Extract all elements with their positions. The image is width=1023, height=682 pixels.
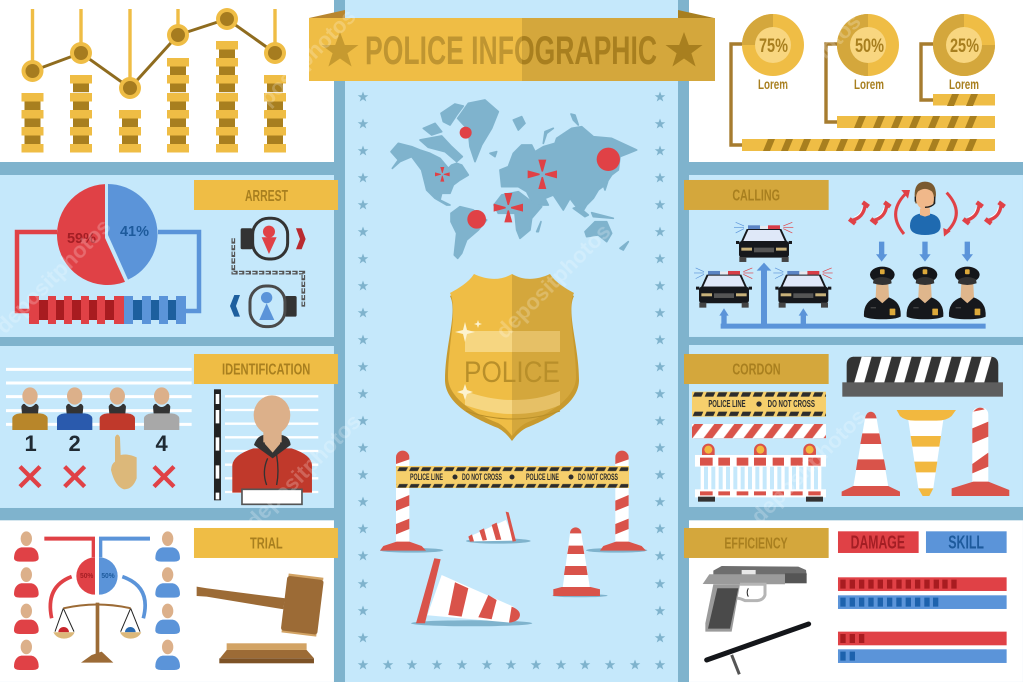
- police tape: POLICE LINE: [708, 399, 746, 410]
- title ribbon: [309, 10, 715, 81]
- striped barrier bar: [692, 424, 826, 438]
- panel: trial: [0, 520, 338, 682]
- label: efficiency: EFFICIENCY: [724, 535, 788, 552]
- police tape: DO NOT CROSS: [768, 399, 815, 410]
- donut 75 percent: [742, 14, 804, 92]
- stacked progress bar: [29, 296, 186, 324]
- lineup suspects: [12, 387, 179, 430]
- lineup height lines: [6, 369, 192, 424]
- icon: handcuffs: [230, 218, 306, 327]
- police officers: [864, 267, 986, 319]
- police line tape: DO NOT CROSS: [462, 472, 502, 482]
- roadblock posts: [380, 451, 647, 553]
- phones: [849, 202, 1005, 224]
- watermark: depositphotos: [741, 9, 866, 134]
- arrows to officers: [876, 242, 973, 262]
- verdict semicircles: 50%: [101, 571, 115, 580]
- watermark: depositphotos: [236, 4, 361, 129]
- donut 25 percent: Lorem: [949, 77, 979, 92]
- white barrier with lamps: [695, 444, 826, 502]
- tag: damage: DAMAGE: [851, 531, 905, 552]
- label: arrest: [194, 180, 338, 210]
- star border: [358, 92, 665, 670]
- label: calling: [684, 180, 829, 210]
- panel: center column: [345, 0, 678, 682]
- police line tape: [396, 466, 629, 489]
- police tape: [692, 392, 826, 417]
- title text: POLICE INFOGRAPHIC: [365, 29, 657, 73]
- police line tape: POLICE LINE: [526, 472, 559, 482]
- panel: identification: [0, 346, 338, 508]
- cone: [842, 412, 900, 496]
- blue dispatch arrows: [719, 263, 986, 329]
- label: cordon: [684, 354, 829, 384]
- mugshot portrait: [214, 389, 318, 504]
- call arrows: [896, 190, 956, 237]
- panel: cordon: [684, 345, 1023, 507]
- pie chart 59 / 41: 41%: [120, 223, 149, 240]
- watermark: depositphotos: [746, 404, 871, 529]
- location markers: [435, 127, 620, 229]
- bracket connectors: [731, 44, 933, 145]
- donut 75 percent: Lorem: [758, 77, 788, 92]
- coin stacks: [22, 41, 286, 152]
- label: trial: [194, 528, 338, 558]
- pie chart 59 / 41: 59%: [67, 230, 96, 247]
- police line tape: POLICE LINE: [410, 472, 443, 482]
- operator with headset: [910, 182, 941, 235]
- donut 50 percent: [837, 14, 899, 92]
- icon: pointing hand: [111, 435, 137, 489]
- police line tape: DO NOT CROSS: [578, 472, 618, 482]
- tag: skill: SKILL: [948, 531, 984, 552]
- inverted cone: [897, 410, 956, 496]
- rejected marks: [20, 467, 174, 487]
- striped progress bars: [742, 94, 995, 151]
- icon: scales of justice: [53, 603, 141, 663]
- pie chart 59 / 41: [57, 184, 157, 285]
- label: cordon: CORDON: [732, 362, 781, 379]
- roadblock and cones: [380, 451, 647, 626]
- icon: gavel: [197, 573, 324, 663]
- post: [952, 408, 1009, 496]
- police badge: [445, 274, 579, 441]
- lineup numbers: 1: [25, 431, 37, 456]
- panel: percent stats: [689, 0, 1023, 162]
- verdict semicircles: 50%: [80, 571, 94, 580]
- donut 50 percent: 50%: [855, 36, 884, 57]
- icon: star left: [322, 32, 358, 66]
- donut 50 percent: Lorem: [854, 77, 884, 92]
- tag: damage: [838, 531, 919, 553]
- watermark: depositphotos: [491, 219, 616, 344]
- donut 25 percent: [933, 14, 995, 92]
- blue jury: [155, 531, 180, 670]
- label: arrest: ARREST: [245, 188, 288, 205]
- label: identification: IDENTIFICATION: [222, 361, 310, 378]
- blue connector: [158, 232, 199, 311]
- damage and skill bars: [838, 577, 1007, 663]
- world map: [391, 100, 637, 258]
- verdict semicircles: [44, 537, 150, 618]
- pie connector brackets: [17, 232, 57, 311]
- watermark: depositphotos: [241, 409, 366, 534]
- donut 25 percent: 25%: [950, 36, 979, 57]
- tag: skill: [926, 531, 1007, 553]
- lineup numbers: 4: [156, 431, 169, 456]
- label: efficiency: [684, 528, 829, 558]
- fallen and standing cones: [411, 512, 608, 626]
- icon: star right: [666, 32, 702, 66]
- police cars: [694, 222, 833, 308]
- panel: efficiency: [684, 520, 1023, 682]
- watermark: [0, 4, 871, 534]
- label: calling: CALLING: [732, 187, 780, 204]
- line chart: [22, 8, 286, 99]
- police badge: POLICE: [464, 356, 560, 389]
- icon: baton: [707, 624, 809, 674]
- donut 75 percent: 75%: [759, 36, 788, 57]
- panel: coin chart: [0, 0, 334, 162]
- icon: pistol: [703, 566, 807, 632]
- lineup numbers: [25, 431, 169, 456]
- label: identification: [194, 354, 338, 384]
- continents: [391, 100, 637, 258]
- panel: arrest: [0, 175, 338, 337]
- label: trial: TRIAL: [250, 535, 283, 552]
- panel: calling: [684, 175, 1023, 337]
- lineup numbers: 2: [69, 431, 81, 456]
- gate barrier: [842, 357, 1003, 397]
- red jury: [14, 531, 39, 670]
